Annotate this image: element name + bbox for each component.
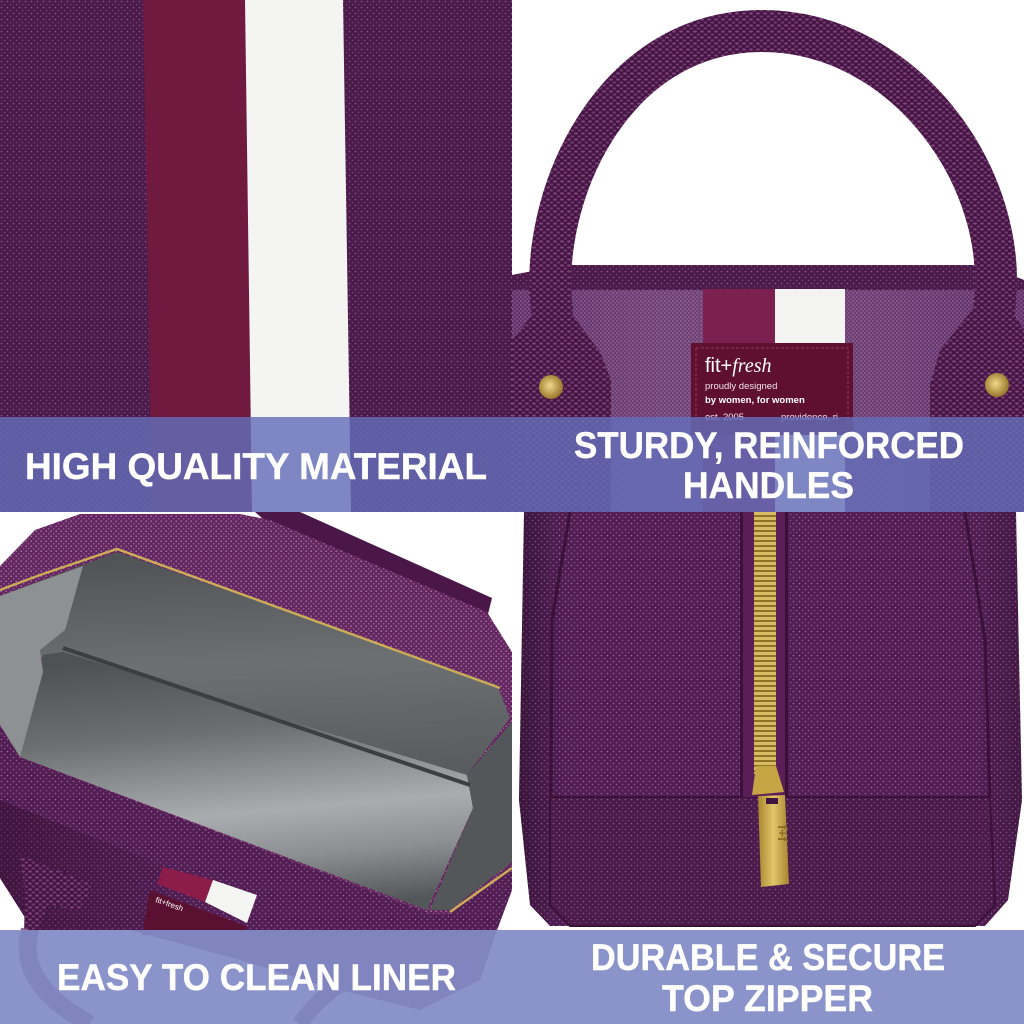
brand label: providence, ri bbox=[781, 412, 838, 423]
caption band: durable and secure top zipper: DURABLE & SECURE bbox=[591, 937, 945, 978]
under-band handle and body ghost bbox=[28, 930, 497, 1024]
caption band: durable and secure top zipper: TOP ZIPPER bbox=[662, 978, 873, 1019]
back handle peek bbox=[255, 512, 492, 618]
bag handle bbox=[550, 31, 996, 310]
zipper edges bbox=[0, 549, 512, 912]
right liner wall bbox=[430, 722, 512, 910]
zipper tape bbox=[740, 512, 788, 797]
bag top body bbox=[512, 265, 1024, 512]
bag body bbox=[519, 512, 1022, 926]
bag stripe bbox=[157, 867, 257, 923]
caption band: sturdy reinforced handles: STURDY, REINFORCED bbox=[574, 425, 964, 466]
caption band: sturdy reinforced handles: HANDLES bbox=[683, 465, 854, 506]
brand label bbox=[691, 343, 853, 435]
bottom panel bbox=[550, 797, 995, 926]
fabric swatch bbox=[0, 0, 512, 512]
caption band: easy to clean liner: EASY TO CLEAN LINER bbox=[57, 957, 456, 998]
right rivet bbox=[985, 373, 1009, 397]
front rim bbox=[0, 725, 512, 930]
caption band: high quality material bbox=[0, 417, 512, 512]
brand label: fit+fresh bbox=[705, 355, 772, 377]
left handle tab bbox=[512, 305, 611, 512]
zipper pull: f+f bbox=[775, 825, 790, 842]
caption band: easy to clean liner bbox=[0, 930, 512, 1024]
maroon stripe bbox=[143, 0, 252, 512]
side panel seams bbox=[551, 512, 990, 797]
brand label bbox=[142, 890, 248, 935]
left rivet bbox=[539, 375, 563, 399]
front bag lower shade bbox=[0, 800, 170, 930]
bag stripe bbox=[703, 289, 845, 512]
zipper slider bbox=[752, 766, 784, 795]
brand label: by women, for women bbox=[705, 395, 805, 406]
brand label: fit+fresh bbox=[154, 895, 184, 913]
left liner wall bbox=[0, 566, 83, 757]
brand label: est. 2005 bbox=[705, 412, 744, 423]
panel: durable and secure top zipper bbox=[512, 512, 1024, 1024]
zipper teeth bbox=[754, 512, 776, 774]
panel: high quality material bbox=[0, 0, 512, 512]
caption band: high quality material: HIGH QUALITY MATERIAL bbox=[25, 446, 487, 487]
white stripe bbox=[245, 0, 351, 512]
panel: sturdy reinforced handles bbox=[512, 31, 1024, 512]
bag outer shell bbox=[0, 514, 512, 930]
side handle bbox=[20, 855, 93, 932]
bag floor liner bbox=[20, 652, 473, 910]
panel: easy to clean liner bbox=[0, 512, 512, 1024]
right handle tab bbox=[930, 300, 1024, 512]
brand label: proudly designed bbox=[705, 381, 777, 392]
liner seam bbox=[63, 648, 470, 785]
zipper pull bbox=[758, 795, 790, 887]
bag back wall liner bbox=[0, 552, 510, 775]
caption band: sturdy reinforced handles bbox=[512, 417, 1024, 512]
caption band: durable and secure top zipper bbox=[512, 930, 1024, 1024]
